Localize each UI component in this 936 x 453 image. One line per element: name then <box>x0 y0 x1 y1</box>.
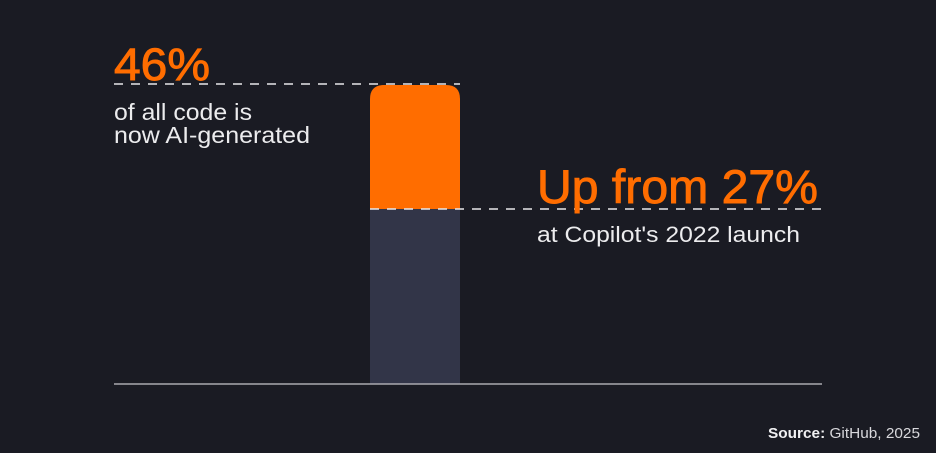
callout: up from 27%: Up from 27% <box>537 160 818 213</box>
bar: 46% orange segment <box>370 85 460 209</box>
bar chart <box>114 84 822 384</box>
callout: 46%: 46% <box>114 39 210 90</box>
callout: up from 27%: at Copilot's 2022 launch <box>537 222 800 247</box>
bar: 27% base segment <box>370 209 460 384</box>
source: Source: GitHub, 2025 <box>768 425 920 442</box>
callout: 46%: of all code is <box>114 99 252 125</box>
callout: 46%: now AI-generated <box>114 122 310 148</box>
callout: 46% <box>114 39 310 148</box>
callout: up from 27% <box>537 160 818 247</box>
